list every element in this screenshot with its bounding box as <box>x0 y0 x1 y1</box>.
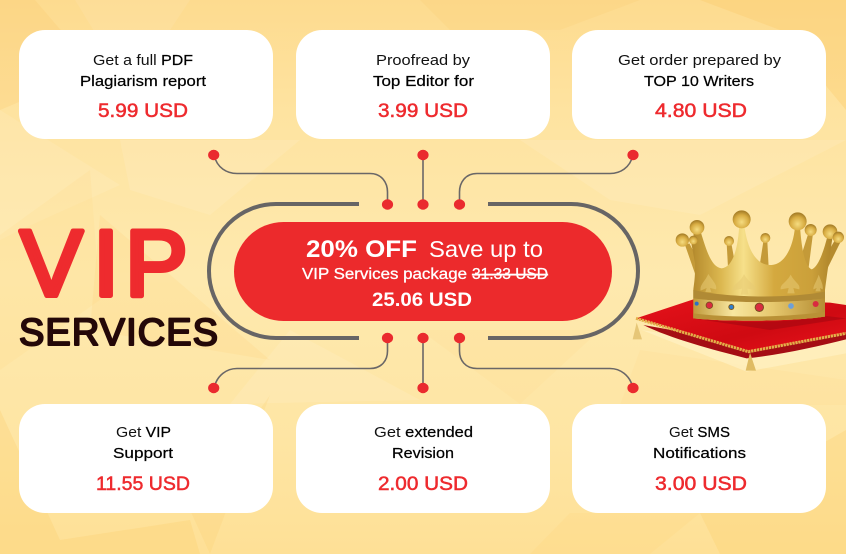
discount pill: 20% OFF <box>306 236 417 263</box>
card: top editor proofreading: Proofread by <box>376 53 471 69</box>
card: SMS notifications: 3.00 USD <box>655 474 747 495</box>
card: SMS notifications: Notifications <box>653 446 746 462</box>
cushion shadow <box>642 330 846 372</box>
card: SMS notifications <box>572 404 826 513</box>
left tassel <box>633 323 642 339</box>
card: extended revision <box>296 404 550 513</box>
card: PDF plagiarism report: Get a full PDF <box>93 53 193 69</box>
card: SMS notifications: Get SMS <box>669 425 730 441</box>
gems <box>695 301 819 312</box>
card: top 10 writers: 4.80 USD <box>655 101 747 122</box>
heading: SERVICES: SERVICES <box>19 312 218 354</box>
card: VIP support: 11.55 USD <box>96 474 190 495</box>
discount pill: Save up to <box>429 236 543 262</box>
discount pill <box>234 222 612 321</box>
icon: crown on red cushion <box>633 210 846 372</box>
discount pill: 31.33 USD <box>472 266 548 283</box>
card: top editor proofreading <box>296 30 550 139</box>
discount pill: 25.06 USD <box>372 290 472 311</box>
card: PDF plagiarism report <box>19 30 273 139</box>
front tassel <box>746 353 756 371</box>
card: top editor proofreading: 3.99 USD <box>378 101 468 122</box>
heading: VIP: VIP <box>20 210 188 316</box>
card: top 10 writers <box>572 30 826 139</box>
crown finials <box>676 210 844 247</box>
discount pill: VIP Services package <box>302 266 467 283</box>
card: extended revision: Revision <box>392 446 454 462</box>
card: PDF plagiarism report: Plagiarism report <box>80 74 206 90</box>
card: PDF plagiarism report: 5.99 USD <box>98 101 188 122</box>
card: extended revision: Get extended <box>374 425 473 441</box>
crown band <box>693 290 825 321</box>
back crown spikes <box>685 233 841 278</box>
card: VIP support <box>19 404 273 513</box>
fleur-de-lis emblems <box>700 274 823 295</box>
crown body <box>693 223 833 321</box>
oval track <box>209 204 638 338</box>
cushion <box>636 299 846 358</box>
card: top editor proofreading: Top Editor for <box>373 74 474 90</box>
connectors and dots <box>208 150 639 393</box>
card: VIP support: Support <box>113 446 173 462</box>
card: top 10 writers: TOP 10 Writers <box>644 74 754 90</box>
card: VIP support: Get VIP <box>116 425 171 441</box>
card: extended revision: 2.00 USD <box>378 474 468 495</box>
card: top 10 writers: Get order prepared by <box>618 53 782 69</box>
